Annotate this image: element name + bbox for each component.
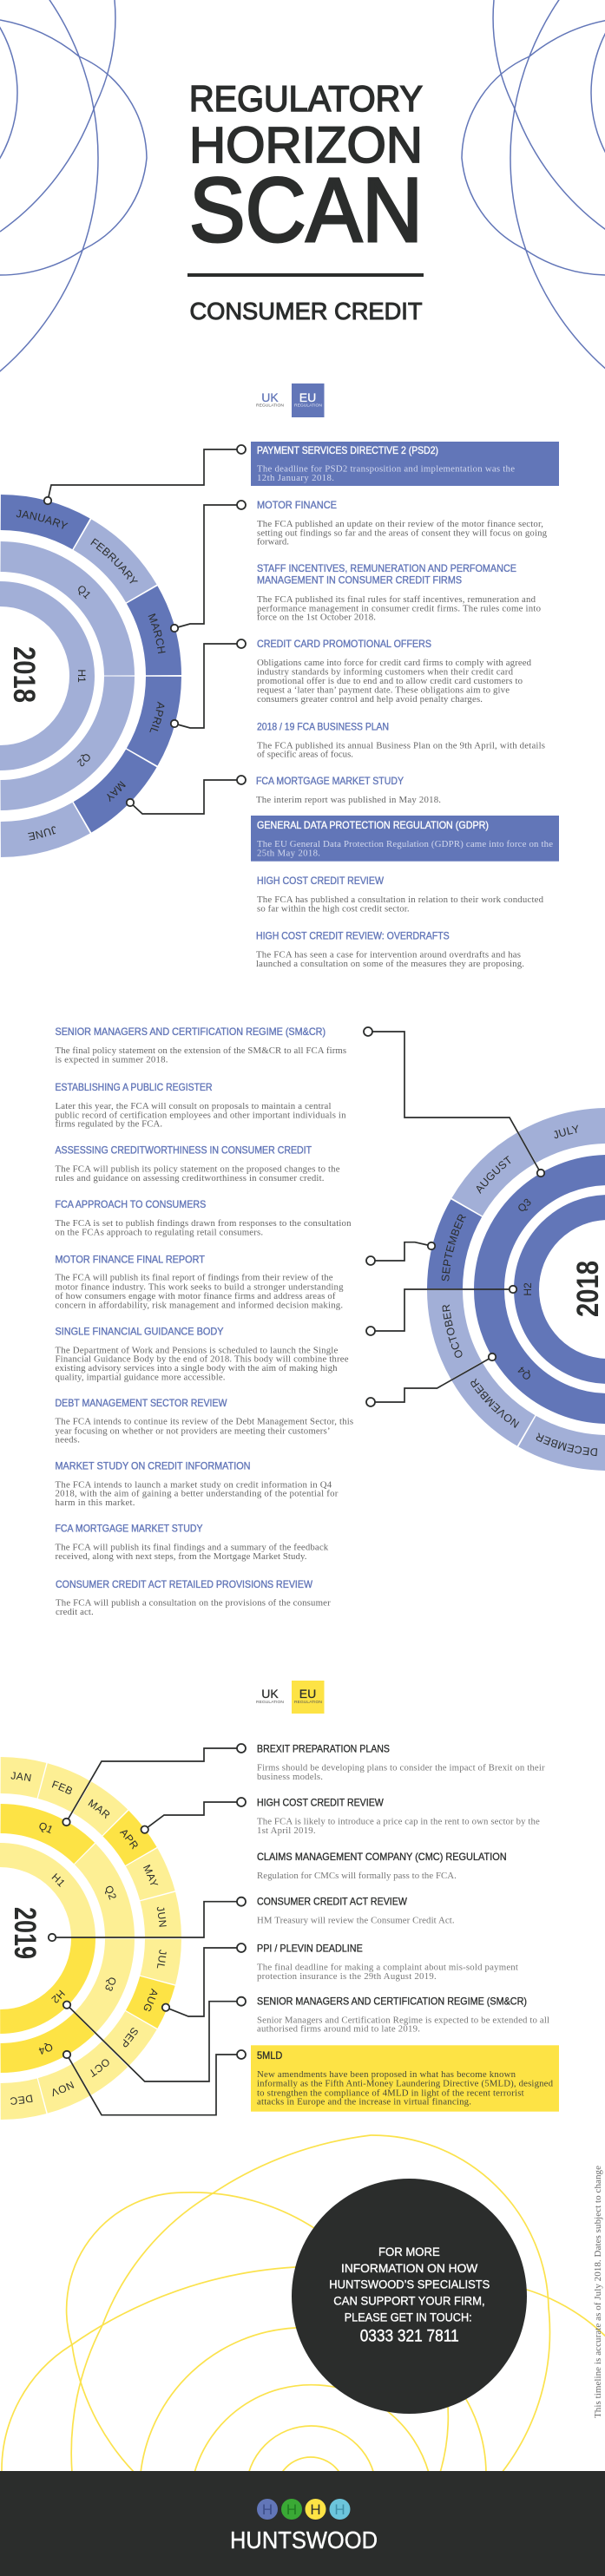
legend: UK / EU regulation (blue): REGULATION bbox=[294, 403, 322, 408]
text block: single financial guidance body: existing advisory services into a single body with the aim of making high bbox=[56, 1363, 338, 1373]
text block: motor finance: MOTOR FINANCE bbox=[257, 499, 337, 511]
text block: staff incentives: force on the 1st October 2018. bbox=[257, 613, 376, 623]
connector: consumer credit act to H2 bbox=[49, 1898, 246, 1941]
text block: motor finance final report: concern in affordability, risk management and informed decision making. bbox=[56, 1300, 343, 1310]
text block: mortgage market study: The FCA will publish its final findings and a summary of the feedback bbox=[56, 1543, 329, 1553]
month labels: MARCH bbox=[148, 613, 166, 654]
month labels: JUL bbox=[156, 1950, 167, 1968]
text block: motor finance: forward. bbox=[257, 537, 289, 547]
connector: SM&CR to H2 bbox=[63, 1997, 246, 2081]
text block: SM&CR: SENIOR MANAGERS AND CERTIFICATION REGIME (SM&CR) bbox=[56, 1026, 326, 1038]
text block: high cost credit review bbox=[257, 875, 544, 914]
text block: creditworthiness: rules and guidance on assessing creditworthiness in consumer credit. bbox=[56, 1173, 325, 1183]
half labels: H1 bbox=[52, 1873, 64, 1887]
legend: UK / EU regulation (yellow): UK bbox=[261, 1687, 279, 1701]
half-year ring bbox=[0, 1855, 83, 2022]
quarter labels bbox=[76, 586, 90, 767]
text block: motor finance bbox=[257, 499, 548, 547]
text block: motor finance: setting out findings so far and the areas of consent they will focus on going bbox=[257, 528, 548, 539]
text block: credit information bbox=[56, 1459, 339, 1508]
text block: consumer credit act review: CONSUMER CREDIT ACT REVIEW bbox=[257, 1896, 407, 1908]
quarter labels: Q4 bbox=[517, 1367, 530, 1380]
text block: retailed provisions: CONSUMER CREDIT ACT RETAILED PROVISIONS REVIEW bbox=[56, 1578, 313, 1590]
month labels: MAY bbox=[107, 781, 126, 802]
text block: credit card promotional offers: CREDIT CARD PROMOTIONAL OFFERS bbox=[257, 638, 431, 650]
text block: public register: firms regulated by the FCA. bbox=[56, 1119, 162, 1130]
panel: PSD2: The deadline for PSD2 transposition and implementation was the bbox=[257, 463, 515, 474]
month labels: DEC bbox=[10, 2094, 33, 2105]
half labels bbox=[51, 1873, 65, 2002]
quarter ring bbox=[489, 1170, 605, 1409]
month labels: NOV bbox=[52, 2081, 75, 2096]
text block: PPI: The final deadline for making a complaint about mis-sold payment bbox=[257, 1962, 518, 1972]
footer bar bbox=[0, 2471, 605, 2576]
connector: PPI to August bbox=[162, 1943, 246, 2016]
call to action circle: HUNTSWOOD’S SPECIALISTS bbox=[329, 2278, 490, 2291]
text block: credit information: harm in this market. bbox=[56, 1498, 135, 1508]
text block: Brexit bbox=[257, 1742, 545, 1782]
text block: mortgage market study bbox=[56, 1523, 329, 1562]
quarter labels: Q1 bbox=[39, 1822, 52, 1834]
text block: retailed provisions: credit act. bbox=[56, 1607, 94, 1617]
text block: approach to consumers bbox=[56, 1198, 352, 1237]
year label: 2018 bbox=[571, 1261, 605, 1317]
panel: PSD2: 12th January 2018. bbox=[257, 473, 334, 483]
text block: public register: ESTABLISHING A PUBLIC REGISTER bbox=[56, 1081, 213, 1093]
text block: high cost credit review bbox=[257, 1796, 540, 1836]
text block: credit card promotional offers: consumers greater control and help avoid penalty charges. bbox=[257, 694, 483, 705]
month labels: OCT bbox=[90, 2060, 109, 2077]
month ring bbox=[385, 1065, 605, 1513]
legend: UK / EU regulation (yellow): REGULATION bbox=[256, 1700, 284, 1704]
text block: mortgage market study: FCA MORTGAGE MARKET STUDY bbox=[56, 1523, 203, 1535]
text block: Brexit: Firms should be developing plans to consider the impact of Brexit on their bbox=[257, 1762, 545, 1773]
half-year ring bbox=[0, 593, 82, 758]
year label: 2018 bbox=[7, 646, 41, 703]
month labels: FEBRUARY bbox=[90, 538, 138, 583]
month labels: JULY bbox=[554, 1124, 578, 1138]
title: REGULATORY bbox=[189, 78, 423, 119]
panel: GDPR: The EU General Data Protection Regulation (GDPR) came into force on the bbox=[257, 839, 553, 849]
panel: 5MLD: New amendments have been proposed in what has become known bbox=[257, 2069, 516, 2080]
month labels: SEPTEMBER bbox=[441, 1215, 466, 1281]
text block: mortgage market study: The interim report was published in May 2018. bbox=[256, 795, 441, 805]
connector: motor finance bbox=[171, 501, 246, 632]
month labels: OCTOBER bbox=[443, 1305, 462, 1358]
half labels: H2 bbox=[51, 1990, 65, 2002]
text block: business plan: 2018 / 19 FCA BUSINESS PLAN bbox=[257, 720, 389, 732]
month labels bbox=[441, 1124, 597, 1456]
connector: single guidance body to H2 bbox=[366, 1286, 516, 1335]
connector: motor finance report to September bbox=[366, 1242, 435, 1265]
call to action circle bbox=[292, 2179, 527, 2414]
title: CONSUMER CREDIT bbox=[189, 298, 422, 324]
quarter labels: Q1 bbox=[78, 586, 90, 599]
text block: approach to consumers: on the FCAs approach to regulating retail consumers. bbox=[56, 1227, 263, 1237]
month labels: JAN bbox=[10, 1772, 31, 1782]
legend: UK / EU regulation (blue): EU bbox=[299, 390, 316, 404]
text block: high cost credit review: HIGH COST CREDIT REVIEW bbox=[257, 1796, 384, 1808]
wheel: 2018 second half bbox=[427, 1108, 605, 1471]
text block: PPI: PPI / PLEVIN DEADLINE bbox=[257, 1943, 363, 1955]
quarter labels: Q4 bbox=[38, 2043, 52, 2055]
year label: 2019 bbox=[8, 1907, 42, 1959]
panel: 5MLD bbox=[251, 2045, 559, 2112]
text block: creditworthiness: The FCA will publish its policy statement on the proposed changes to the bbox=[56, 1164, 340, 1175]
month labels bbox=[10, 1772, 167, 2105]
legend: UK / EU regulation (blue) bbox=[256, 383, 325, 417]
panel: PSD2 bbox=[251, 442, 559, 486]
decorative yellow curves bbox=[2, 2135, 605, 2556]
legend: UK / EU regulation (yellow) bbox=[256, 1681, 325, 1714]
connector: debt management to Q4 bbox=[366, 1354, 496, 1406]
text block: SM&CR: Senior Managers and Certification Regime is expected to be extended to all bbox=[257, 2015, 549, 2025]
legend: UK / EU regulation (yellow): REGULATION bbox=[294, 1700, 322, 1704]
text block: CMC regulation bbox=[257, 1851, 507, 1881]
text block: motor finance final report: of how consumers engage with motor finance firms and address areas of bbox=[56, 1291, 336, 1301]
text block: SM&CR bbox=[56, 1026, 346, 1065]
call to action circle: CAN SUPPORT YOUR FIRM, bbox=[333, 2294, 485, 2308]
call to action circle: INFORMATION ON HOW bbox=[341, 2261, 478, 2275]
month labels: NOVEMBER bbox=[470, 1378, 519, 1428]
text block: overdrafts: The FCA has seen a case for intervention around overdrafts and has bbox=[256, 950, 521, 960]
connector: 5MLD to Q4 bbox=[63, 2050, 246, 2115]
text block: SM&CR: is expected in summer 2018. bbox=[56, 1054, 168, 1065]
connector: credit card bbox=[171, 639, 246, 728]
text block: overdrafts: launched a consultation on some of the measures they are proposing. bbox=[256, 959, 524, 969]
text block: staff incentives: STAFF INCENTIVES, REMUNERATION AND PERFOMANCE bbox=[257, 562, 516, 574]
month labels: JUNE bbox=[28, 826, 56, 841]
text block: public register: Later this year, the FCA will consult on proposals to maintain a central bbox=[56, 1101, 332, 1111]
legend: UK / EU regulation (blue): REGULATION bbox=[256, 403, 284, 408]
text block: business plan: of specific areas of focus. bbox=[257, 750, 353, 760]
text block: Brexit: BREXIT PREPARATION PLANS bbox=[257, 1742, 390, 1754]
text block: credit card promotional offers: Obligations came into force for credit card firms to comply with agreed bbox=[257, 658, 532, 668]
panel: PSD2: PAYMENT SERVICES DIRECTIVE 2 (PSD2) bbox=[257, 444, 438, 456]
text block: single financial guidance body: SINGLE FINANCIAL GUIDANCE BODY bbox=[56, 1325, 224, 1337]
text block: staff incentives: The FCA published its final rules for staff incentives, remuneration and bbox=[257, 594, 536, 605]
month labels: SEP bbox=[123, 2028, 138, 2048]
text block: debt management: DEBT MANAGEMENT SECTOR REVIEW bbox=[56, 1397, 227, 1409]
text block: overdrafts bbox=[256, 930, 524, 969]
month labels: AUGUST bbox=[476, 1156, 510, 1194]
month labels: APR bbox=[120, 1830, 138, 1850]
connector: mortgage study bbox=[127, 776, 246, 814]
quarter labels: Q2 bbox=[105, 1886, 116, 1900]
call to action circle: FOR MORE bbox=[378, 2245, 440, 2258]
month labels: JANUARY bbox=[16, 510, 68, 529]
panel: GDPR bbox=[251, 816, 559, 862]
text block: motor finance: The FCA published an update on their review of the motor finance sector, bbox=[257, 519, 543, 529]
panel: 5MLD: informally as the Fifth Anti-Money Laundering Directive (5MLD), designed bbox=[257, 2079, 554, 2089]
call to action circle: PLEASE GET IN TOUCH: bbox=[345, 2311, 472, 2324]
text block: SM&CR bbox=[257, 1996, 549, 2035]
month labels: MAR bbox=[89, 1799, 109, 1819]
panel: 5MLD: attacks in Europe and the increase in virtual financing. bbox=[257, 2097, 471, 2107]
month labels: MAY bbox=[143, 1865, 158, 1884]
text block: public register bbox=[56, 1081, 346, 1130]
text block: overdrafts: HIGH COST CREDIT REVIEW: OVERDRAFTS bbox=[256, 930, 450, 942]
quarter ring bbox=[0, 556, 120, 796]
text block: creditworthiness bbox=[56, 1144, 340, 1183]
quarter labels: Q3 bbox=[518, 1199, 531, 1211]
text block: debt management: needs. bbox=[56, 1435, 80, 1445]
text block: staff incentives bbox=[257, 562, 541, 623]
text block: motor finance final report: The FCA will publish its final report of findings from their review of the bbox=[56, 1273, 333, 1283]
text block: debt management: The FCA intends to continue its review of the Debt Management Sector, this bbox=[56, 1416, 353, 1426]
text block: motor finance final report: MOTOR FINANCE FINAL REPORT bbox=[56, 1253, 206, 1265]
quarter labels: Q3 bbox=[106, 1977, 116, 1991]
month labels: DECEMBER bbox=[536, 1432, 597, 1456]
text block: Brexit: business models. bbox=[257, 1772, 323, 1782]
logo mark: H bbox=[286, 2501, 297, 2518]
disclaimer note: This timeline is accurate as of July 2018. Dates subject to change bbox=[593, 2166, 603, 2418]
title bbox=[187, 78, 424, 324]
text block: high cost credit review: HIGH COST CREDIT REVIEW bbox=[257, 875, 385, 887]
text block: high cost credit review: so far within the high cost credit sector. bbox=[257, 903, 410, 914]
text block: PPI bbox=[257, 1943, 518, 1982]
text block: single financial guidance body: Financial Guidance Body by the end of 2018. This body will combine three bbox=[56, 1354, 349, 1365]
quarter labels bbox=[38, 1822, 116, 2055]
text block: credit card promotional offers: request a ‘later than’ payment date. These obligations aim to give bbox=[257, 685, 510, 695]
text block: single financial guidance body: The Department of Work and Pensions is scheduled to launch the Single bbox=[56, 1345, 339, 1355]
text block: SM&CR: authorised firms around mid to late 2019. bbox=[257, 2024, 420, 2035]
text block: credit information: 2018, with the aim of gaining a better understanding of the potential for bbox=[56, 1489, 339, 1499]
panel: 5MLD: 5MLD bbox=[257, 2049, 283, 2061]
call to action circle: 0333 321 7811 bbox=[360, 2327, 459, 2345]
legend: UK / EU regulation (yellow): EU bbox=[299, 1687, 316, 1701]
text block: approach to consumers: FCA APPROACH TO CONSUMERS bbox=[56, 1198, 206, 1210]
title: HORIZON bbox=[189, 117, 423, 174]
wheel: 2019 bbox=[0, 1757, 181, 2120]
text block: business plan bbox=[257, 720, 545, 760]
quarter labels bbox=[517, 1199, 531, 1380]
text block: PPI: protection insurance is the 29th August 2019. bbox=[257, 1971, 437, 1982]
logo mark: H bbox=[310, 2501, 321, 2518]
text block: credit card promotional offers: promotional offer is due to end and to allow credit card customers to bbox=[257, 676, 523, 686]
text block: staff incentives: performance management in consumer credit firms. The rules come into bbox=[257, 603, 541, 613]
panel: 5MLD: to strengthen the compliance of 4MLD in light of the recent terrorist bbox=[257, 2088, 524, 2098]
text block: high cost credit review: The FCA has published a consultation in relation to their work conducted bbox=[257, 895, 544, 905]
decorative blue circles, top left bbox=[0, 0, 147, 439]
connector: SM&CR to Q3 bbox=[364, 1027, 544, 1177]
text block: mortgage market study: received, along with next steps, from the Mortgage Market Study. bbox=[56, 1551, 307, 1562]
panel: GDPR: GENERAL DATA PROTECTION REGULATION (GDPR) bbox=[257, 819, 489, 831]
logo mark: H bbox=[262, 2501, 273, 2518]
text block: CMC regulation: CLAIMS MANAGEMENT COMPANY (CMC) REGULATION bbox=[257, 1851, 507, 1863]
text block: mortgage market study bbox=[256, 775, 441, 805]
text block: single financial guidance body bbox=[56, 1325, 349, 1383]
text block: approach to consumers: The FCA is set to publish findings drawn from responses to the consultation bbox=[56, 1218, 352, 1229]
text block: creditworthiness: ASSESSING CREDITWORTHINESS IN CONSUMER CREDIT bbox=[56, 1144, 312, 1157]
month labels: APRIL bbox=[149, 701, 165, 732]
text block: single financial guidance body: quality, impartial guidance more accessible. bbox=[56, 1373, 226, 1383]
text block: debt management bbox=[56, 1397, 353, 1445]
text block: credit information: The FCA intends to launch a market study on credit information in Q4 bbox=[56, 1479, 332, 1490]
text block: CMC regulation: Regulation for CMCs will formally pass to the FCA. bbox=[257, 1871, 457, 1881]
decorative blue circles, top right bbox=[462, 0, 605, 439]
text block: high cost credit review: The FCA is likely to introduce a price cap in the rent to own sector by the bbox=[257, 1816, 540, 1826]
half label: H1 bbox=[76, 669, 88, 683]
quarter labels: Q2 bbox=[76, 754, 90, 767]
text block: SM&CR: The final policy statement on the extension of the SM&CR to all FCA firms bbox=[56, 1045, 346, 1056]
text block: credit information: MARKET STUDY ON CREDIT INFORMATION bbox=[56, 1459, 250, 1472]
half-year ring bbox=[526, 1208, 605, 1371]
month labels: JUN bbox=[156, 1907, 167, 1927]
text block: public register: public record of certification employees and other important individuals in bbox=[56, 1110, 346, 1120]
text block: credit card promotional offers: industry standards by informing customers when their credit card bbox=[257, 667, 514, 678]
connector: Brexit to Q1 bbox=[62, 1744, 246, 1825]
quarter ring bbox=[0, 1769, 169, 2107]
text block: business plan: The FCA published its annual Business Plan on the 9th April, with details bbox=[257, 740, 545, 751]
text block: consumer credit act review bbox=[257, 1896, 455, 1925]
text block: mortgage market study: FCA MORTGAGE MARKET STUDY bbox=[256, 775, 404, 787]
text block: debt management: year focusing on whether or not providers are meeting their customers’ bbox=[56, 1426, 330, 1436]
text block: motor finance final report bbox=[56, 1253, 344, 1310]
wheel: 2018 first half bbox=[0, 495, 181, 857]
month labels: FEB bbox=[52, 1780, 73, 1794]
month ring bbox=[0, 452, 224, 900]
connector: high cost credit to April bbox=[141, 1798, 246, 1833]
panel: GDPR: 25th May 2018. bbox=[257, 848, 320, 858]
month labels bbox=[16, 510, 166, 841]
connector: PSD2 bbox=[44, 445, 246, 504]
text block: motor finance final report: motor finance industry. This work seeks to build a stronger understanding bbox=[56, 1282, 344, 1293]
logo wordmark: HUNTSWOOD bbox=[230, 2527, 378, 2553]
month labels: AUG bbox=[144, 1989, 158, 2011]
legend: UK / EU regulation (blue): UK bbox=[261, 390, 279, 404]
text block: retailed provisions bbox=[56, 1578, 331, 1617]
logo mark bbox=[257, 2499, 351, 2520]
text block: consumer credit act review: HM Treasury will review the Consumer Credit Act. bbox=[257, 1915, 455, 1925]
title: SCAN bbox=[189, 160, 423, 261]
logo mark: H bbox=[334, 2501, 345, 2518]
text block: high cost credit review: 1st April 2019. bbox=[257, 1825, 316, 1836]
text block: credit card promotional offers bbox=[257, 638, 532, 705]
half label: H2 bbox=[522, 1282, 534, 1296]
text block: SM&CR: SENIOR MANAGERS AND CERTIFICATION REGIME (SM&CR) bbox=[257, 1996, 527, 2008]
text block: staff incentives: MANAGEMENT IN CONSUMER CREDIT FIRMS bbox=[257, 574, 462, 587]
month ring bbox=[0, 1708, 231, 2169]
text block: retailed provisions: The FCA will publish a consultation on the provisions of the consumer bbox=[56, 1598, 331, 1609]
